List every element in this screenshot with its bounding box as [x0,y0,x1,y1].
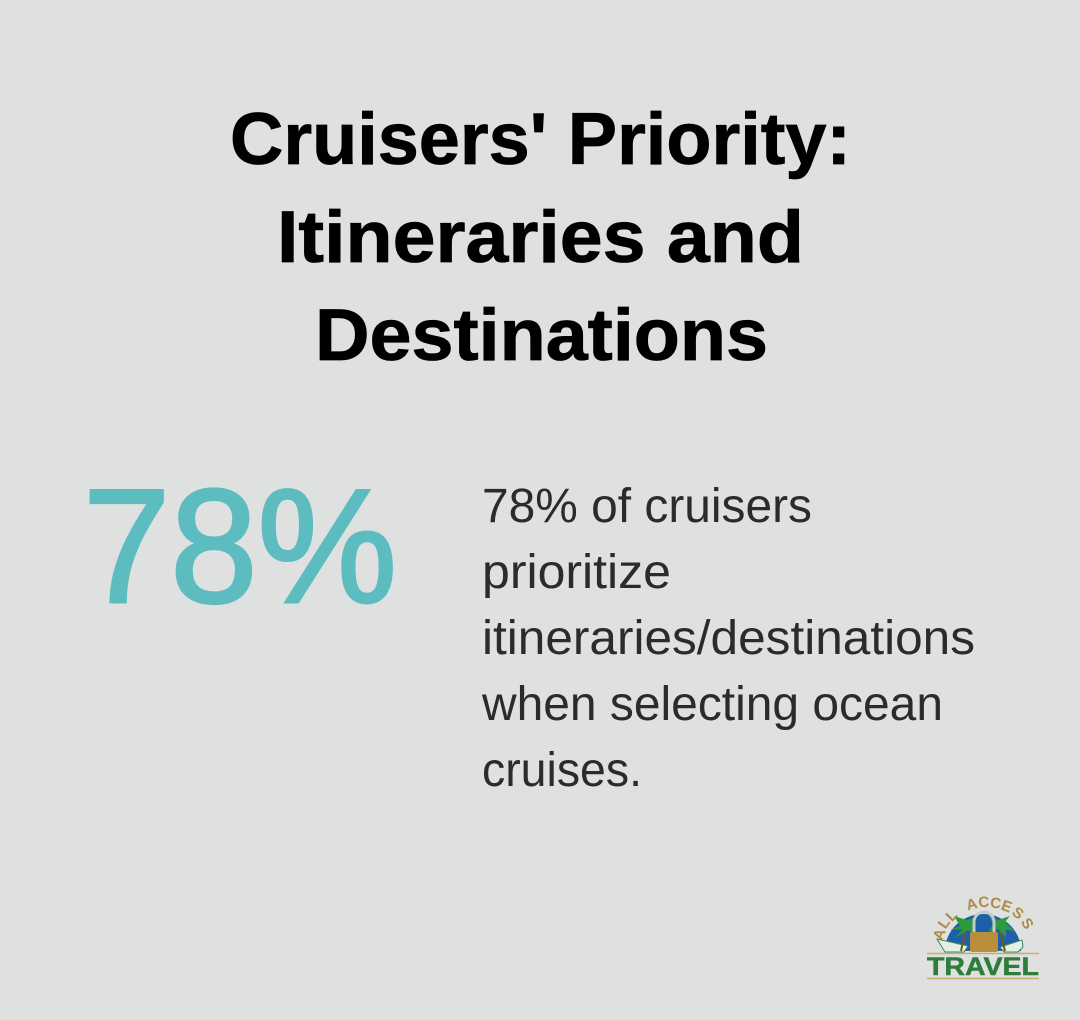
logo arched lettering: A [930,926,950,942]
logo: All Access Travel [927,894,1039,981]
description text: cruises. [482,744,642,797]
logo palm leaves [950,916,1015,938]
logo padlock body [970,932,998,952]
big statistic: 78%: 78% [83,456,397,637]
logo wordmark: TRAVEL [927,953,1039,981]
description text: itineraries/destinations [482,612,975,665]
logo padlock shackle [974,912,994,932]
title: Destinations [315,295,768,376]
logo dome with sky and sea [945,914,1021,951]
description text: prioritize [482,546,671,599]
logo arched lettering: C [989,894,1002,913]
description text: 78% of cruisers [482,480,812,533]
logo boats [937,939,1023,952]
logo arched lettering: E [999,897,1014,916]
logo palm trees [961,922,1005,951]
title: Cruisers' Priority: [230,99,851,180]
description text: when selecting ocean [481,678,943,731]
logo arched lettering: L [935,915,954,932]
logo arched lettering: L [943,907,961,925]
logo arched lettering: A [964,895,979,914]
logo rules [927,954,1039,978]
logo arched lettering: S [1017,915,1037,932]
logo arched lettering: C [978,894,990,911]
title: Itineraries and [277,197,804,278]
logo arched lettering: S [1009,904,1027,923]
logo arched lettering [930,894,1037,942]
title [230,99,851,376]
description text [481,480,975,797]
